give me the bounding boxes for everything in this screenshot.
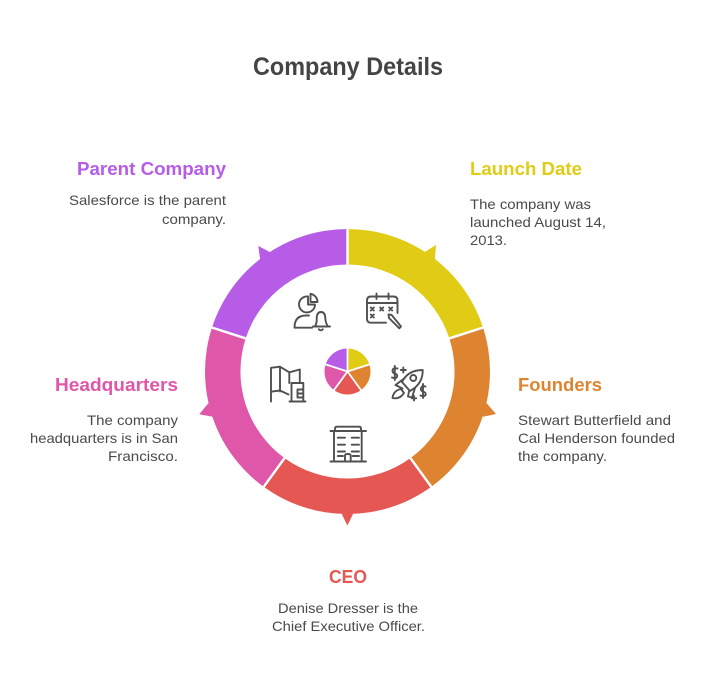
text: founders description (518, 412, 675, 464)
text: CEO description (272, 600, 425, 634)
ring segment: CEO (264, 458, 431, 526)
text: founders description: the company. (518, 448, 607, 464)
heading: CEO: CEO (329, 566, 367, 587)
icon: rocket with dollars (392, 366, 426, 400)
panel: CEO text (272, 566, 425, 634)
text: headquarters description: The company (87, 412, 178, 428)
heading: parent company: Parent Company (77, 158, 227, 179)
ring segment: parent company (212, 229, 348, 338)
panel: headquarters text (30, 374, 178, 464)
text: headquarters description (30, 412, 178, 464)
icon: office building (330, 427, 366, 462)
text: founders description: Stewart Butterfield and (518, 412, 671, 428)
center mini pie chart (323, 346, 372, 394)
icon: person with pie and bell (294, 294, 330, 330)
icon: calendar with pencil (367, 294, 401, 328)
text: CEO description: Chief Executive Officer. (272, 618, 425, 634)
ring segment: headquarters (199, 328, 285, 487)
text: headquarters description: headquarters is in San (30, 430, 178, 446)
text: launch date description: 2013. (470, 232, 507, 248)
donut ring chart (199, 226, 496, 526)
ring segment: launch date (348, 229, 483, 338)
text: founders description: Cal Henderson founded (518, 430, 675, 446)
text: parent company description (69, 192, 226, 227)
text: CEO description: Denise Dresser is the (278, 600, 418, 616)
text: launch date description (470, 196, 606, 248)
panel: founders text (518, 374, 675, 464)
text: headquarters description: Francisco. (108, 448, 178, 464)
title: Company Details (253, 53, 443, 81)
heading: launch date: Launch Date (470, 158, 582, 179)
heading: founders: Founders (518, 374, 602, 395)
heading: headquarters: Headquarters (55, 374, 178, 395)
text: parent company description: Salesforce is the parent (69, 192, 226, 208)
icon: map with building (271, 367, 306, 402)
text: launch date description: launched August 14, (470, 214, 606, 230)
text: launch date description: The company was (470, 196, 591, 212)
text: parent company description: company. (162, 211, 226, 227)
ring segment: founders (410, 328, 496, 487)
panel: parent company text (69, 158, 227, 227)
panel: launch date text (470, 158, 606, 248)
